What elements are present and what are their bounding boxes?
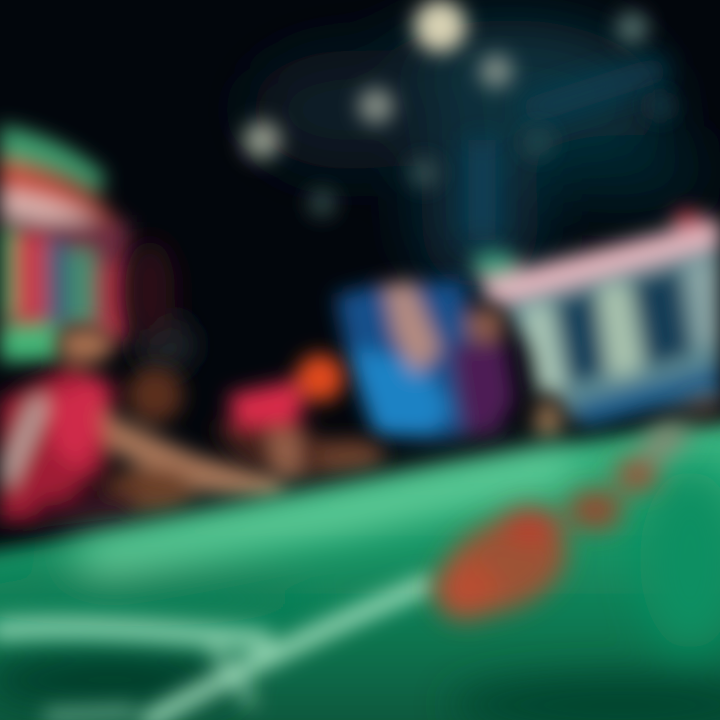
ceiling beams [468, 55, 668, 240]
table highlights [0, 450, 720, 720]
background: teal ceiling haze [250, 20, 710, 290]
blue player and purple player [335, 280, 562, 440]
left carousel [0, 125, 130, 362]
right building [471, 210, 720, 428]
red player with orange hat [210, 354, 385, 480]
left player in red with outstretched arm [0, 327, 285, 530]
green table [0, 420, 720, 720]
table lines [0, 585, 425, 720]
dice and chips on the table [427, 400, 720, 633]
ceiling lights [243, 0, 674, 217]
dark figure behind the left player [125, 240, 195, 375]
